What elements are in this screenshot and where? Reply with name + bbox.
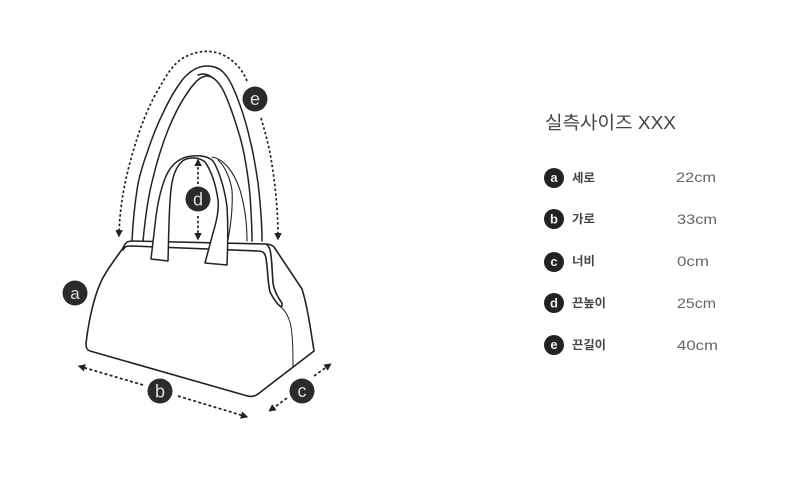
bag body bbox=[86, 241, 314, 396]
badge d: d bbox=[193, 190, 203, 210]
dotted arrow: b width bbox=[82, 367, 244, 416]
row e: 끈길이 40cm: 40cm bbox=[677, 337, 718, 353]
dotted arrow: d strap height bbox=[197, 163, 199, 236]
row b: 가로 33cm: b bbox=[550, 212, 558, 226]
size table bbox=[544, 168, 718, 355]
badge e bbox=[242, 86, 268, 112]
row b: 가로 33cm bbox=[544, 209, 717, 229]
bag frame bbox=[123, 244, 282, 307]
badge b bbox=[148, 378, 172, 404]
row a: 세로 22cm: 세로 bbox=[572, 171, 595, 185]
small handle front strap bbox=[151, 156, 228, 265]
title: 실측사이즈 XXX bbox=[545, 113, 676, 133]
row c: 너비 0cm bbox=[544, 252, 709, 272]
row e: 끈길이 40cm bbox=[544, 335, 718, 355]
badge d bbox=[186, 186, 210, 212]
row e: 끈길이 40cm: e bbox=[550, 337, 558, 352]
large back handle bbox=[132, 66, 262, 241]
small handle back strap bbox=[212, 157, 247, 241]
row d: 끈높이 25cm: d bbox=[550, 296, 558, 310]
row c: 너비 0cm: 너비 bbox=[572, 254, 595, 268]
row a: 세로 22cm: 22cm bbox=[676, 169, 716, 185]
row d: 끈높이 25cm bbox=[544, 293, 716, 313]
dotted arrow: e handle length bbox=[119, 51, 278, 236]
row d: 끈높이 25cm: 끈높이 bbox=[572, 296, 606, 310]
badge e: e bbox=[250, 89, 260, 109]
bag illustration bbox=[86, 66, 314, 396]
row a: 세로 22cm: a bbox=[550, 170, 558, 185]
row b: 가로 33cm: 가로 bbox=[572, 211, 595, 226]
dotted arrow: c depth bbox=[272, 366, 328, 409]
row c: 너비 0cm: c bbox=[550, 254, 558, 269]
badge c: c bbox=[298, 381, 306, 401]
bag side seam bbox=[282, 308, 293, 367]
row c: 너비 0cm: 0cm bbox=[677, 253, 709, 269]
badge a: a bbox=[70, 284, 80, 303]
badge a bbox=[62, 280, 88, 306]
row b: 가로 33cm: 33cm bbox=[677, 211, 717, 227]
row d: 끈높이 25cm: 25cm bbox=[677, 295, 716, 311]
badge b: b bbox=[155, 382, 165, 402]
badge c bbox=[290, 378, 314, 404]
row e: 끈길이 40cm: 끈길이 bbox=[572, 338, 606, 352]
row a: 세로 22cm bbox=[544, 168, 716, 188]
